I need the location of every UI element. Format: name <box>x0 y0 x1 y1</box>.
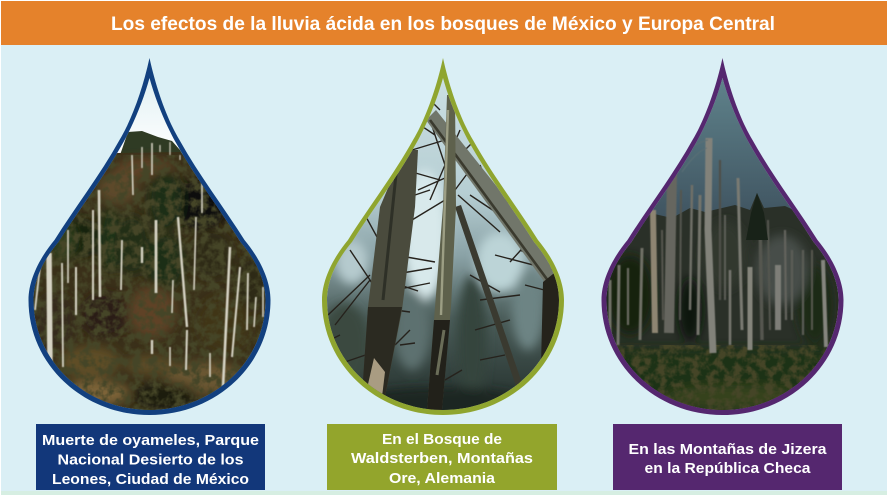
caption: Desierto de los Leones <box>36 424 265 490</box>
drop outline <box>602 58 844 415</box>
caption: Desierto de los Leones: Muerte de oyameles, Parque <box>42 432 259 449</box>
caption: Waldsterben: Ore, Alemania <box>389 470 496 487</box>
drop photo: foggy forest with broken trunks <box>327 79 559 410</box>
white dead trunks <box>35 142 263 387</box>
caption: Waldsterben: En el Bosque de <box>382 431 502 448</box>
caption: Jizera <box>613 424 842 490</box>
grey dead trunks <box>610 138 826 353</box>
caption: Desierto de los Leones: Leones, Ciudad de México <box>52 471 249 488</box>
drop photo: forest with white dead firs <box>34 81 266 410</box>
title banner <box>1 1 887 45</box>
fallen trunk <box>426 110 560 288</box>
panel: Montañas de Jizera <box>598 55 848 490</box>
title banner: Los efectos de la lluvia ácida en los bosques de México y Europa Central <box>111 13 775 35</box>
caption: Desierto de los Leones: Nacional Desierto de los <box>58 452 244 468</box>
branches <box>328 100 565 380</box>
drop photo: dead spruce stand over green undergrowth <box>606 78 838 410</box>
left trunk pair <box>362 150 418 397</box>
caption: Jizera: en la República Checa <box>644 460 811 477</box>
central trunk <box>427 95 456 410</box>
caption: Waldsterben: Waldsterben, Montañas <box>351 450 533 467</box>
panel: Bosque de Waldsterben <box>318 55 568 490</box>
caption: Waldsterben <box>327 424 557 490</box>
thin diagonal trunk <box>455 205 523 389</box>
caption: Jizera: En las Montañas de Jizera <box>628 441 827 458</box>
drop outline <box>28 58 270 415</box>
panel: Desierto de los Leones <box>20 55 280 490</box>
drop outline <box>322 58 564 415</box>
